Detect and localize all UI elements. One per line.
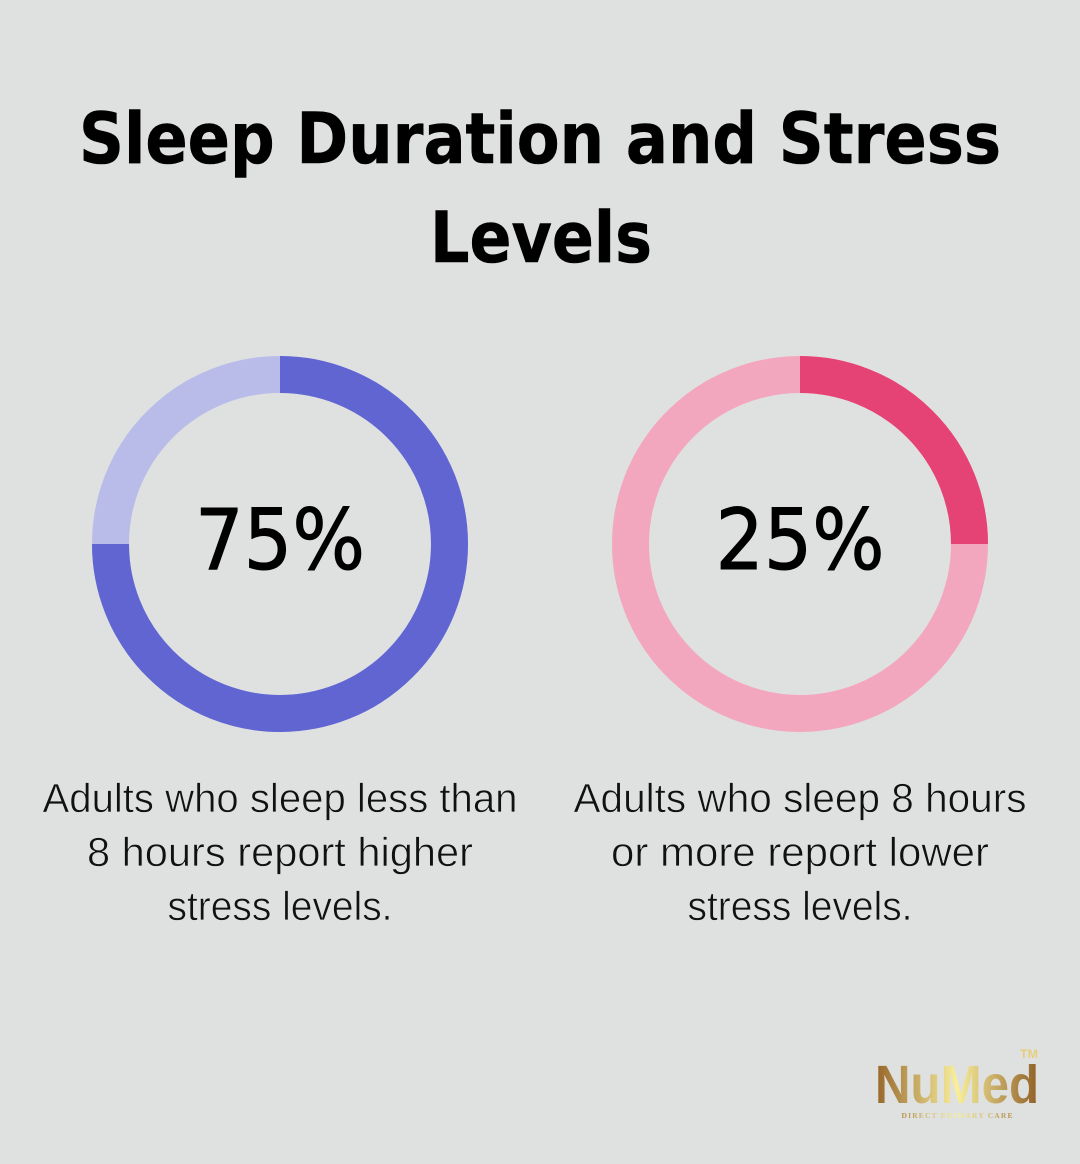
logo: NuMed: DIRECT PRIMARY CARE <box>902 1111 1012 1120</box>
title: Levels <box>430 197 652 279</box>
description: less than 8 hours: 8 hours report higher <box>87 829 473 875</box>
description: 8 hours or more: Adults who sleep 8 hours <box>574 775 1026 821</box>
donut chart: 25%: 25% <box>716 491 884 589</box>
logo: NuMed: TM <box>1020 1047 1038 1061</box>
title <box>79 98 1001 279</box>
panel: adults sleeping less than 8 hours <box>42 374 518 929</box>
description: less than 8 hours <box>42 775 518 929</box>
description: 8 hours or more: or more report lower <box>611 829 989 875</box>
description: 8 hours or more <box>574 775 1026 929</box>
description: 8 hours or more: stress levels. <box>688 883 912 929</box>
donut chart: 75%: 75% <box>195 491 365 589</box>
donut chart: 25% <box>630 374 970 714</box>
description: less than 8 hours: stress levels. <box>168 883 392 929</box>
description: less than 8 hours: Adults who sleep less than <box>42 775 518 821</box>
donut chart: 75% <box>110 374 450 714</box>
panel: adults sleeping 8 hours or more <box>574 374 1026 929</box>
logo: NuMed: NuMed <box>875 1055 1039 1115</box>
